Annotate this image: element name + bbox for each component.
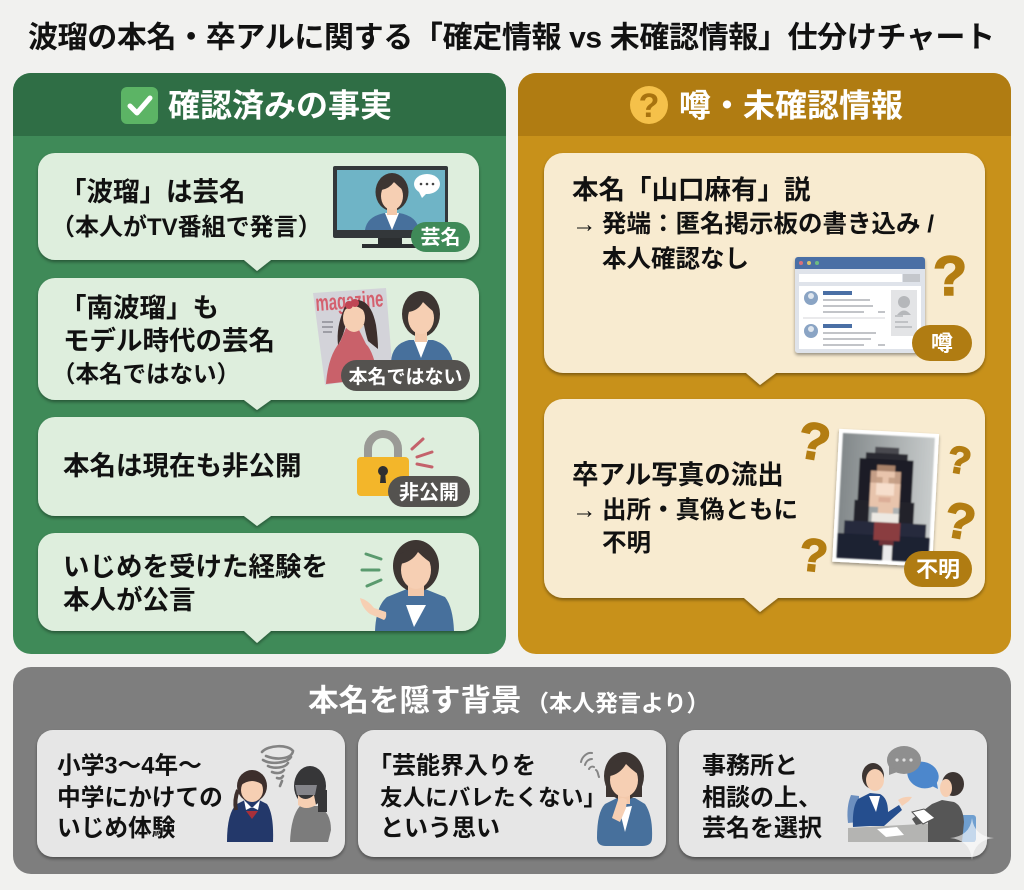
panel: rumours [518, 73, 1011, 654]
icon: question mark: ? [933, 244, 967, 307]
card: bullying experience [37, 730, 345, 857]
icon: bulletin board window [795, 257, 925, 353]
card: name rumour [544, 153, 985, 385]
card: stage name: （本人がTV番組で発言） [51, 213, 322, 241]
icon: magazine and person: magazine [315, 285, 384, 316]
tag: private [388, 476, 470, 507]
card: model name: （本名ではない） [52, 361, 240, 387]
card: real name private [38, 417, 479, 526]
icon: pixelated photo [832, 429, 939, 567]
tag: rumour [912, 325, 972, 361]
tag: unknown: 不明 [916, 557, 960, 582]
card: stage name: 「波瑠」は芸名 [60, 177, 246, 207]
card: stage name [38, 153, 479, 271]
card: name rumour: 発端：匿名掲示板の書き込み / [602, 210, 934, 238]
card: yearbook photo: → [572, 497, 596, 524]
card: yearbook photo: 不明 [602, 530, 651, 557]
card: hide from friends: 友人にバレたくない」 [380, 786, 606, 810]
tag: not real name [341, 360, 470, 391]
card: agency consultation: 事務所と [702, 752, 798, 780]
card: real name private: 本名は現在も非公開 [63, 451, 302, 481]
card: hide from friends: という思い [380, 815, 500, 842]
card: model name: 「南波瑠」も [60, 293, 219, 323]
tag: stage name: 芸名 [420, 226, 460, 249]
icon: question marks: ? [797, 528, 830, 582]
icon: question marks: ? [940, 491, 980, 551]
icon: woman speaking [360, 540, 454, 631]
tag: not real name: 本名ではない [348, 366, 463, 388]
tag: rumour: 噂 [931, 331, 953, 356]
tag: stage name [411, 222, 470, 252]
card: yearbook photo [544, 399, 985, 612]
decorative sparkle mark [950, 818, 994, 860]
icon: magazine and person [313, 285, 453, 385]
card: bullying experience: 中学にかけての [57, 784, 223, 812]
icon: question marks: ? [944, 438, 974, 484]
title: 波瑠の本名・卒アルに関する「確定情報 vs 未確認情報」仕分けチャート [28, 22, 995, 54]
card: model name [38, 278, 479, 410]
card: agency consultation: 相談の上、 [702, 784, 822, 812]
heading: rumours: 噂・未確認情報 [679, 88, 903, 124]
tag: private: 非公開 [399, 481, 459, 504]
card: bullying experience: 小学3〜4年〜 [57, 752, 202, 780]
icon: two students and swirl [227, 746, 331, 842]
heading: rumours: ? [639, 87, 659, 125]
card: name rumour: 本名「山口麻有」説 [572, 175, 811, 205]
icon: question marks [793, 411, 980, 582]
card: bullying experience: いじめ体験 [57, 815, 176, 842]
card: name rumour: → [572, 211, 596, 238]
card: agency consultation [679, 730, 994, 860]
icon: meeting with speech bubbles [847, 746, 976, 842]
card: bullying disclosure: 本人が公言 [63, 585, 196, 615]
icon: thinking woman [581, 752, 652, 846]
card: name rumour: 本人確認なし [602, 245, 749, 273]
icon: question marks: ? [793, 411, 835, 474]
heading: reasons: 本名を隠す背景 [308, 684, 522, 718]
heading: reasons: （本人発言より） [526, 690, 710, 716]
heading: confirmed facts: 確認済みの事実 [168, 88, 392, 124]
icon: padlock [357, 434, 432, 496]
card: yearbook photo: 卒アル写真の流出 [572, 460, 784, 490]
card: hide from friends [358, 730, 666, 857]
card: bullying disclosure: いじめを受けた経験を [63, 552, 328, 582]
card: hide from friends: 「芸能界入りを [368, 752, 536, 780]
card: model name: モデル時代の芸名 [63, 326, 275, 356]
tag: unknown [904, 551, 972, 587]
panel: confirmed facts [13, 73, 506, 654]
card: bullying disclosure [38, 533, 479, 643]
icon: TV with person [333, 166, 448, 248]
heading: reasons [308, 684, 710, 718]
card: yearbook photo: 出所・真偽ともに [602, 496, 798, 524]
panel: background reasons [13, 667, 1011, 874]
card: agency consultation: 芸名を選択 [702, 815, 822, 842]
